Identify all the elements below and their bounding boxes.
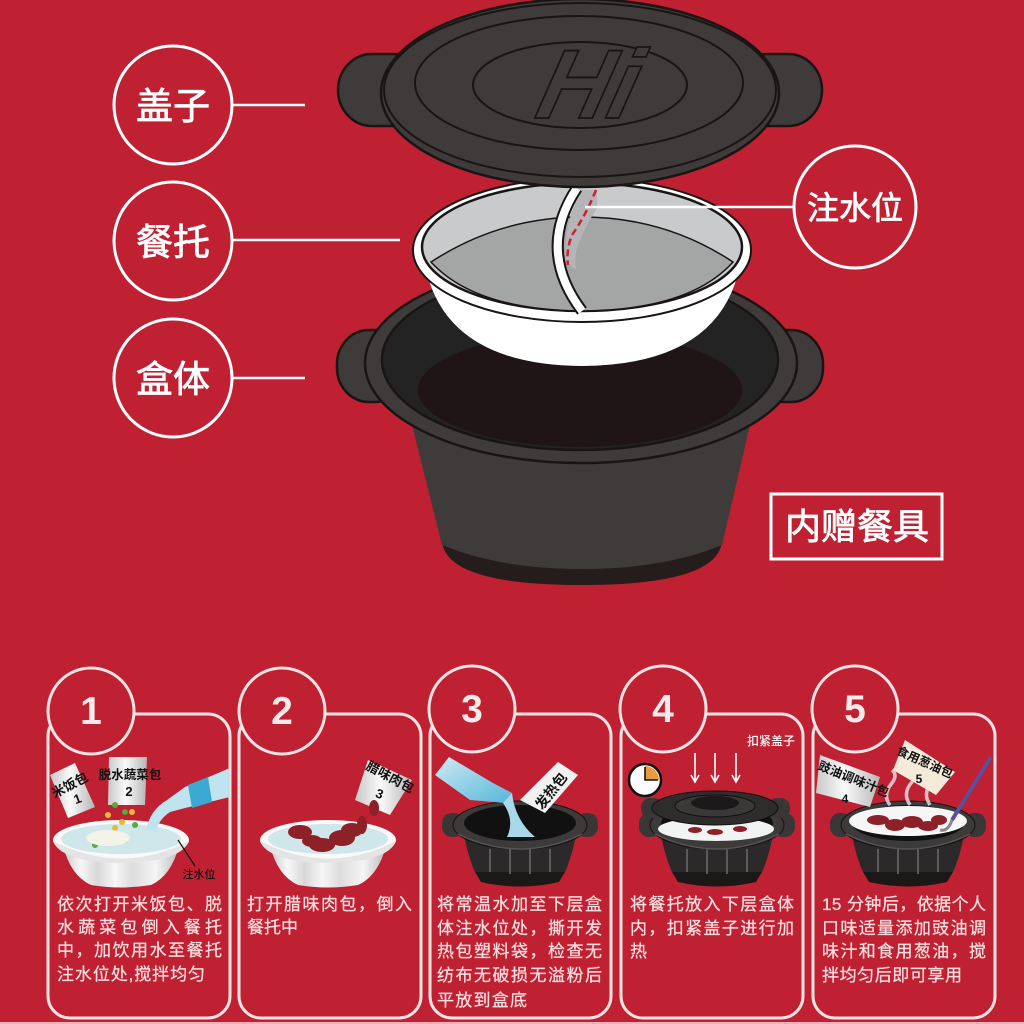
instruction text: 注水位处,搅拌均匀 (57, 965, 205, 984)
illustration: pot, seasoning packets, spoon, steam: 豉油调味汁包 (816, 758, 892, 800)
instruction text: 水蔬菜包倒入餐托 (57, 918, 222, 937)
panel: step 2: 2 (271, 690, 293, 733)
instruction text: 口味适量添加豉油调 (822, 919, 986, 938)
instruction text: 依次打开米饭包、脱 (57, 895, 222, 914)
illustration: pot, bottle, heat pack: 发热包 (532, 769, 570, 812)
panel: step 3 (429, 666, 611, 1018)
illustration: bowl with packets and bottle (49, 757, 230, 888)
instruction text (822, 895, 986, 985)
illustration: pot, seasoning packets, spoon, steam: 5 (916, 772, 923, 786)
illustration: bowl with packets and bottle: 2 (125, 784, 133, 799)
pot body (337, 263, 823, 585)
illustration: pot, seasoning packets, spoon, steam (816, 740, 991, 886)
label: 注水位: 注水位 (807, 190, 903, 226)
instruction text: 15 分钟后，依据个人 (822, 895, 986, 914)
bowl tray with divider (413, 178, 751, 366)
illustration: pot, seasoning packets, spoon, steam: 4 (842, 792, 849, 806)
label: 盖子 (114, 46, 305, 164)
label: 注水位 (585, 146, 916, 268)
box label: 内赠餐具 (771, 494, 942, 559)
instruction text (57, 895, 222, 984)
illustration: bowl with packets and bottle: 脱水蔬菜包 (99, 767, 162, 782)
instruction text: 将餐托放入下层盒体 (630, 895, 794, 914)
instruction text: 体注水位处，撕开发 (437, 919, 602, 938)
instruction text: 拌均匀后即可享用 (822, 966, 962, 985)
illustration: pot, bottle, heat pack (435, 757, 598, 886)
instruction text (437, 895, 602, 1010)
instruction text: 热 (630, 942, 647, 961)
illustration: bowl with packets and bottle: 注水位 (182, 867, 216, 881)
instruction text: 中，加饮用水至餐托 (57, 941, 222, 960)
illustration: pot, seasoning packets, spoon, steam: 食用葱油包 (894, 743, 955, 781)
illustration: bowl with meat packet: 腊味肉包 (364, 758, 417, 796)
lid with Hi logo (338, 0, 822, 187)
instruction text: 纺布无破损无溢粉后 (437, 966, 602, 985)
instruction text: 平放到盒底 (437, 991, 527, 1010)
illustration: bowl with packets and bottle: 1 (71, 790, 83, 807)
label: 餐托 (114, 182, 400, 300)
illustration: bowl with meat packet (260, 758, 417, 888)
instruction text (630, 895, 794, 961)
illustration: bowl with packets and bottle: 米饭包 (49, 769, 91, 801)
box label: 内赠餐具: 内赠餐具 (785, 506, 929, 547)
label: 盖子: 盖子 (136, 86, 210, 127)
panel: step 5: 5 (844, 688, 866, 731)
panel: step 1 (48, 668, 230, 1018)
instruction text: 热包塑料袋，检查无 (437, 942, 602, 961)
panel: step 1: 1 (80, 690, 102, 733)
instruction text: 餐托中 (247, 918, 298, 937)
instruction text: 打开腊味肉包，倒入 (247, 895, 412, 914)
label: 盒体: 盒体 (136, 359, 210, 400)
panel: step 4 (620, 666, 803, 1018)
panel: step 2 (239, 668, 421, 1018)
panel: step 4: 4 (652, 688, 674, 731)
label: 盒体 (114, 319, 305, 437)
caption: 扣紧盖子 (747, 733, 795, 748)
illustration: closed pot (639, 791, 795, 886)
instruction text: 味汁和食用葱油，搅 (822, 942, 986, 961)
illustration: bowl with meat packet: 3 (374, 785, 386, 802)
panel: step 5 (812, 666, 995, 1018)
instruction text (247, 895, 412, 937)
panel: step 3: 3 (461, 688, 483, 731)
instruction text: 将常温水加至下层盒 (437, 895, 602, 914)
icon: clock (629, 764, 661, 796)
label: 餐托: 餐托 (136, 222, 210, 263)
lid with Hi logo: Hi (528, 30, 655, 140)
instruction text: 内，扣紧盖子进行加 (630, 919, 794, 938)
arrows (691, 753, 740, 782)
